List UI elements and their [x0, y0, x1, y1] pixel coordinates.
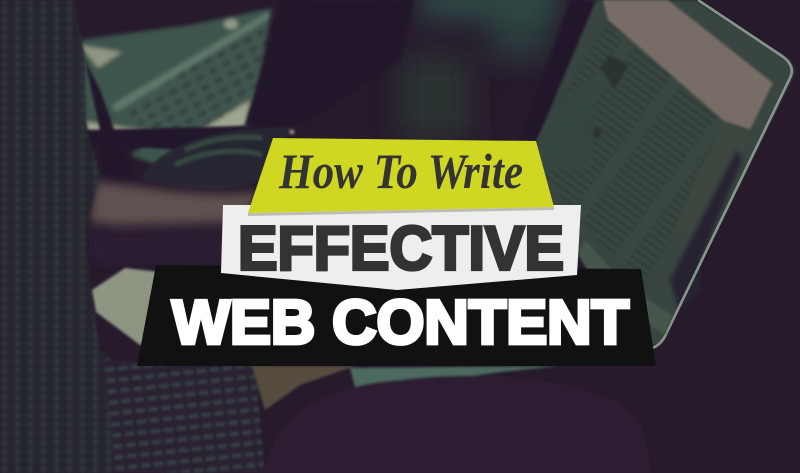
photo: laptop lid silver edge — [652, 0, 792, 348]
photo: phone on lap — [92, 268, 160, 345]
title banner: WEB CONTENT — [137, 265, 656, 366]
title banner: EFFECTIVE — [221, 205, 581, 290]
How To Write text: How To Write — [278, 143, 523, 199]
EFFECTIVE text: EFFECTIVE — [238, 214, 564, 284]
white banner shape — [221, 205, 581, 290]
photo: dark sleeve and strap — [85, 0, 415, 189]
photo: bare forearm — [90, 182, 260, 262]
WEB CONTENT text: WEB CONTENT — [172, 288, 629, 358]
photo: right laptop lid — [520, 0, 795, 348]
photo: glare band on screen — [603, 0, 773, 130]
title banner: How To Write — [248, 138, 554, 213]
photo: knee and laptop base — [252, 366, 652, 473]
photo: rear laptop with keyboard — [80, 8, 272, 180]
photo: dark centre backdrop — [290, 0, 560, 140]
yellow banner drop shadow — [248, 207, 554, 216]
black banner shape — [137, 265, 656, 366]
photo: laptop screen with article — [537, 20, 725, 292]
yellow banner shape — [248, 138, 554, 213]
photo: shirt in foreground — [0, 0, 270, 473]
